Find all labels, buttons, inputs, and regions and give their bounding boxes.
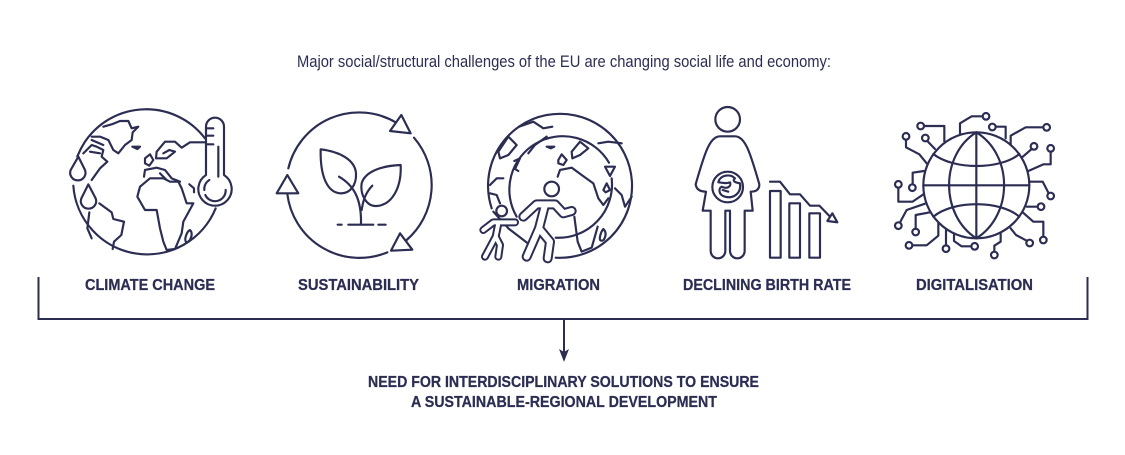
icon: climate change globe with thermometer and drops xyxy=(70,109,232,254)
conclusion text: NEED FOR INTERDISCIPLINARY SOLUTIONS TO ENSURE xyxy=(368,374,759,391)
title: Major social/structural challenges of the EU are changing social life and economy: xyxy=(297,52,831,71)
label: declining birth rate: DECLINING BIRTH RATE xyxy=(683,277,851,294)
label: migration: MIGRATION xyxy=(517,277,600,294)
icon: sustainability plant with cycle arrows xyxy=(277,112,432,258)
bracket joining the five challenges xyxy=(38,277,1088,319)
icon: migration globe with two people xyxy=(483,114,632,258)
label: sustainability: SUSTAINABILITY xyxy=(298,277,419,294)
conclusion text xyxy=(368,374,759,411)
arrow down to conclusion xyxy=(559,319,569,362)
icon: pregnant woman and declining bar chart xyxy=(696,107,837,258)
icon: digital globe with circuit lines xyxy=(895,113,1054,258)
label: climate change: CLIMATE CHANGE xyxy=(85,277,215,294)
conclusion text: A SUSTAINABLE-REGIONAL DEVELOPMENT xyxy=(411,394,717,411)
label: digitalisation: DIGITALISATION xyxy=(916,277,1033,294)
